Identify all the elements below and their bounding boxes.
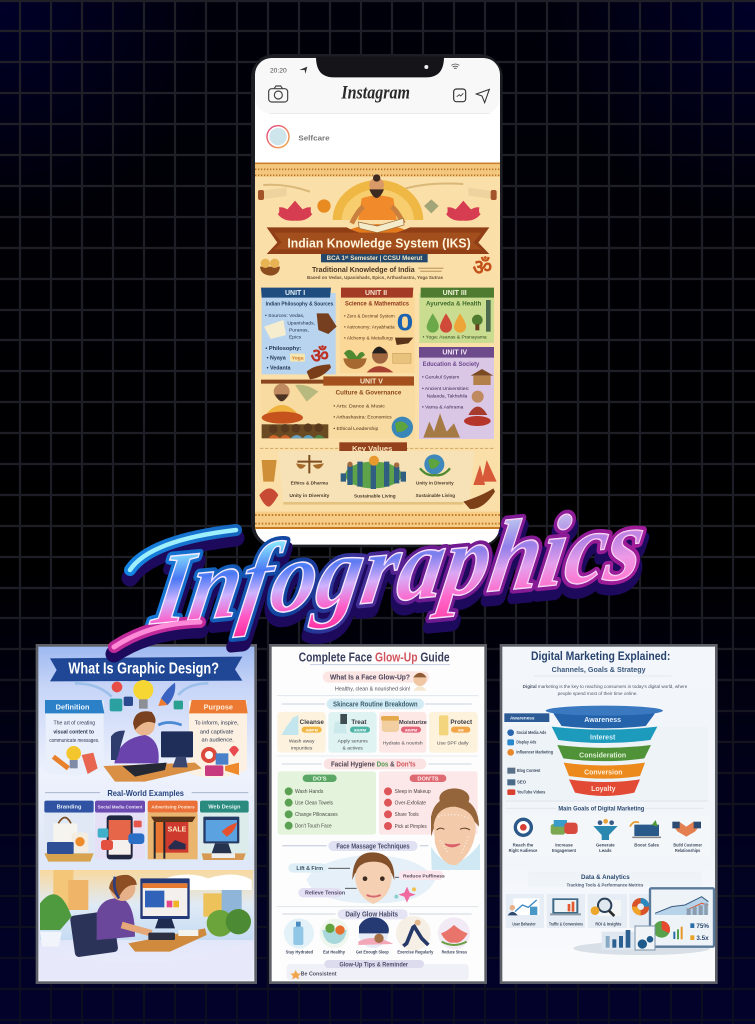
- card 1 purpose panel: and captivate: [200, 729, 233, 735]
- card 1 purpose panel: Purpose: [204, 703, 233, 712]
- massage illustration: Relieve Tension: [305, 891, 345, 897]
- card 1 example: web design: [200, 801, 249, 860]
- key values panel: Ethics & Dharma: [291, 480, 328, 486]
- poster sage illustration: [333, 174, 423, 237]
- card 1 example: advertising: SALE: [168, 827, 187, 834]
- card 3 intro: [523, 684, 688, 696]
- do's panel: [278, 771, 376, 835]
- profile row: [267, 126, 330, 148]
- card 1 title banner: [50, 657, 242, 681]
- unit V panel: • Ethical Leadership: [333, 426, 379, 432]
- card 2 skincare heading: Skincare Routine Breakdown: [333, 702, 418, 709]
- title shadow layer: Infographics: [145, 495, 653, 655]
- poster lotus flowers: [278, 199, 481, 221]
- don'ts panel: DON'TS: [417, 776, 439, 782]
- skincare step: moisturize: Hydrate & nourish: [383, 741, 423, 747]
- card 2 massage heading: [282, 841, 428, 851]
- poster scrolls: [258, 183, 497, 200]
- analytics tiles: ROI & Insights: [595, 922, 622, 927]
- channel list: Blog Content: [517, 768, 541, 773]
- unit IV panel: [419, 347, 494, 439]
- status bar: [270, 64, 459, 75]
- skincare step: protect: Use SPF daily: [437, 741, 469, 747]
- unit I panel: ॐ: [311, 344, 329, 367]
- card 1 definition panel: visual content to: [53, 729, 94, 735]
- unit I panel: [261, 288, 337, 379]
- poster side icons: ॐ: [473, 256, 492, 280]
- card 1 section heading: Real-World Examples: [107, 788, 184, 798]
- instagram header: [269, 82, 490, 113]
- habits icons: Exercise Regularly: [397, 950, 434, 955]
- unit II panel: • Zero & Decimal System: [344, 313, 395, 319]
- dashboard illustration: 3.5x: [696, 935, 709, 942]
- dashboard illustration: [573, 888, 714, 955]
- channel list: SEO: [517, 779, 527, 784]
- unit I panel: Yoga: [292, 356, 304, 362]
- massage illustration: [288, 852, 445, 904]
- unit I panel: • Philosophy:: [265, 346, 301, 352]
- goals row: Leads: [599, 848, 612, 853]
- don'ts panel: Sleep in Makeup: [395, 789, 431, 795]
- unit V panel: UNIT V: [360, 379, 383, 386]
- do's panel: Use Clean Towels: [295, 801, 333, 807]
- title face layer: Infographics: [145, 487, 653, 647]
- skincare step: treat: Treat: [351, 719, 367, 726]
- skincare step: moisturize: Moisturize: [399, 720, 427, 726]
- card 2 intro: [277, 671, 478, 696]
- unit III panel: Ayurveda & Health: [426, 302, 482, 308]
- poster subtitle: Based on Vedas, Upanishads, Epics, Arthashastra, Yoga Sutras: [307, 275, 443, 280]
- card 1 purpose panel: To inform, inspire,: [195, 721, 239, 727]
- unit III panel: • Yoga: Asanas & Pranayama: [423, 334, 487, 340]
- profile row: Selfcare: [298, 135, 330, 142]
- card 1 title banner: What Is Graphic Design?: [68, 660, 219, 677]
- poster title ribbon: Indian Knowledge System (IKS): [287, 236, 471, 251]
- goals row: Relationships: [675, 848, 701, 853]
- unit I panel: Epics: [289, 334, 302, 340]
- unit IV panel: • Varna & Ashrama: [422, 405, 464, 411]
- channel list: [507, 729, 553, 795]
- card 3 title: [531, 650, 672, 676]
- card 1 example: advertising: Advertising Posters: [151, 804, 195, 810]
- habits icons: [284, 916, 470, 955]
- unit II panel: • Astronomy: Aryabhatta: [344, 325, 395, 331]
- script title Infographics: [114, 487, 653, 655]
- phone mockup: [251, 54, 503, 547]
- card 1 example: social: [95, 801, 145, 859]
- unit I panel: UNIT I: [285, 290, 305, 297]
- unit II panel: UNIT II: [365, 290, 387, 297]
- instagram header: Instagram: [341, 82, 410, 103]
- poster subtitle: [307, 254, 443, 280]
- analytics heading: Data & Analytics: [581, 874, 630, 881]
- tips panel: [287, 961, 469, 980]
- skincare step: treat: Apply serums: [338, 739, 368, 745]
- card 2 intro: Healthy, clean & nourished skin!: [335, 687, 411, 693]
- unit V panel: • Arts: Dance & Music: [333, 403, 386, 409]
- card 1 example: web design: Web Design: [208, 805, 241, 811]
- poster side icons: [260, 256, 492, 280]
- poster title ribbon: [267, 227, 489, 254]
- unit IV panel: Education & Society: [423, 362, 480, 368]
- unit II panel: [340, 288, 415, 373]
- funnel: Awareness: [584, 717, 621, 724]
- card 2 hygiene heading: Facial Hygiene Dos & Don'ts: [331, 762, 416, 769]
- skincare step: protect: [429, 712, 478, 753]
- channel list: Social Media Ads: [516, 730, 547, 735]
- massage illustration: Reduce Puffiness: [403, 873, 445, 879]
- title outline layer: Infographics: [145, 487, 653, 647]
- card 3 intro: people spend most of their time online.: [558, 691, 638, 696]
- don'ts panel: [379, 771, 478, 835]
- unit II panel: • Alchemy & Metallurgy: [344, 335, 394, 341]
- goals row: Increase: [555, 842, 573, 847]
- do's panel: Wash Hands: [295, 789, 324, 795]
- analytics heading: Tracking Tools & Performance Metrics: [567, 883, 644, 889]
- funnel: Loyalty: [591, 786, 616, 793]
- habits icons: Eat Healthy: [323, 949, 345, 954]
- unit III panel: UNIT III: [443, 290, 467, 297]
- skincare step: moisturize: [379, 712, 427, 753]
- unit I panel: • Vedanta: [267, 365, 290, 371]
- card 1 bottom scene: [40, 870, 253, 980]
- skincare step: cleanse: [277, 712, 326, 753]
- card 1 definition panel: Definition: [56, 703, 90, 712]
- card 1 idea icons: [75, 680, 208, 725]
- card: What Is Graphic Design: [37, 645, 256, 983]
- goals row: Generate: [596, 842, 615, 847]
- IKS poster: [255, 163, 500, 528]
- unit I panel: Puranas,: [289, 328, 309, 334]
- card 1 purpose panel: [189, 700, 248, 778]
- unit I panel: Upanishads,: [287, 320, 315, 326]
- card 3 intro: Digital marketing is the key to reaching consumers in today's digital world, where: [523, 684, 684, 689]
- card 2 habits heading: Daily Glow Habits: [345, 912, 398, 919]
- tips panel: Be Consistent: [301, 971, 337, 977]
- don'ts panel: Over-Exfoliate: [395, 801, 426, 807]
- title face layer: Infographics: [145, 487, 653, 647]
- funnel: Interest: [590, 734, 616, 741]
- card 2 intro: What Is a Face Glow-Up?: [330, 673, 410, 682]
- card 2 title: Complete Face Glow-Up Guide: [299, 650, 450, 665]
- goals row: [504, 815, 711, 857]
- skincare step: cleanse: impurities: [291, 745, 313, 751]
- analytics heading: [528, 872, 702, 889]
- funnel: [504, 706, 708, 800]
- do's panel: Change Pillowcases: [295, 812, 338, 818]
- card 1 purpose panel: an audience.: [201, 738, 234, 744]
- do's panel: DO'S: [313, 776, 327, 782]
- card 2 hygiene heading: [277, 756, 478, 769]
- card 1 example: social: Social Media Content: [98, 804, 143, 810]
- skincare step: treat: AM/PM: [354, 728, 366, 732]
- card 2 habits heading: [277, 907, 478, 919]
- goals row: Right Audience: [509, 848, 538, 853]
- skincare step: treat: [328, 712, 377, 753]
- habits icons: Stay Hydrated: [286, 949, 313, 954]
- poster subtitle: BCA 1ˢᵗ Semester | CCSU Meerut: [327, 255, 422, 262]
- don'ts panel: Share Tools: [395, 812, 419, 818]
- unit I panel: Indian Philosophy & Sources: [266, 302, 333, 308]
- goals row: Reach the: [513, 842, 534, 847]
- unit I panel: • Nyaya: [267, 356, 286, 362]
- channel list: Influencer Marketing: [516, 750, 553, 755]
- tips panel: Glow-Up Tips & Reminder: [339, 961, 408, 968]
- woman face portrait: [431, 788, 480, 870]
- skincare step: cleanse: Wash away: [289, 739, 315, 745]
- card 1 definition panel: The art of creating: [53, 721, 95, 727]
- skincare step: protect: AM: [458, 728, 464, 732]
- unit V panel: • Arthashastra: Economics: [333, 415, 392, 421]
- unit III panel: [419, 288, 494, 343]
- poster bottom border: [255, 512, 500, 528]
- skincare step: protect: Protect: [450, 719, 473, 726]
- unit I panel: • Sources: Vedas,: [265, 313, 304, 319]
- key values banner: Key Values: [352, 444, 392, 453]
- status bar: 20:20: [270, 68, 287, 75]
- dashboard illustration: 75%: [696, 923, 709, 930]
- card 3 title: Channels, Goals & Strategy: [552, 665, 647, 674]
- goals row: Boost Sales: [634, 842, 660, 847]
- key values panel: Sustainable Living: [354, 493, 396, 499]
- channel list: YouTube Videos: [517, 789, 546, 794]
- massage illustration: Lift & Firm: [296, 866, 323, 872]
- analytics tiles: Traffic & Conversions: [549, 922, 583, 927]
- skincare step: treat: & actives: [343, 745, 363, 751]
- card 1 example: branding: Branding: [57, 805, 82, 811]
- goals heading: Main Goals of Digital Marketing: [558, 806, 644, 813]
- channel list: Display Ads: [516, 740, 537, 745]
- unit II panel: 0: [397, 309, 413, 336]
- card 1 designer illustration: [103, 711, 202, 782]
- card 1 definition panel: [45, 700, 104, 775]
- card 1 example: advertising: [148, 801, 198, 859]
- card 2 skincare heading: [282, 699, 472, 709]
- unit V panel: [261, 376, 415, 438]
- key values panel: Unity in Diversity: [289, 493, 330, 499]
- goals row: Build Customer: [673, 842, 702, 847]
- key values panel: Sustainable Living: [416, 493, 455, 499]
- don'ts panel: Pick at Pimples: [395, 824, 427, 830]
- unit IV panel: Nalanda, Takhshila: [427, 393, 468, 399]
- funnel: Consideration: [579, 753, 626, 760]
- key values panel: Unity in Diversity: [416, 480, 454, 486]
- card 2 massage heading: Face Massage Techniques: [336, 844, 410, 851]
- card: Complete Face Glow-Up Guide: [270, 645, 486, 983]
- skincare step: cleanse: AM/PM: [306, 728, 318, 732]
- skincare step: cleanse: Cleanse: [300, 719, 324, 726]
- funnel: Awareness: [510, 715, 535, 720]
- unit II panel: Science & Mathematics: [345, 302, 410, 308]
- do's panel: Don't Touch Face: [295, 824, 332, 830]
- unit IV panel: • Ancient Universities:: [422, 386, 469, 392]
- unit IV panel: UNIT IV: [442, 350, 468, 357]
- card 1 definition panel: communicate messages.: [49, 738, 100, 744]
- card 1 example: branding: [44, 801, 94, 862]
- unit IV panel: • Gurukul System: [422, 374, 459, 380]
- key values panel: [259, 451, 497, 509]
- funnel: Conversion: [584, 770, 623, 777]
- poster subtitle: Traditional Knowledge of India: [312, 267, 415, 274]
- skincare step: moisturize: AM/PM: [405, 728, 417, 732]
- habits icons: Reduce Stress: [442, 950, 467, 955]
- analytics tiles: User Behavior: [512, 922, 536, 927]
- analytics tiles: [506, 894, 653, 928]
- card: Digital Marketing Explained: [501, 645, 716, 983]
- habits icons: Get Enough Sleep: [356, 949, 389, 954]
- goals row: Engagement: [552, 848, 577, 853]
- key values banner: [260, 442, 493, 453]
- card 3 title: Digital Marketing Explained:: [531, 650, 670, 663]
- unit V panel: Culture & Governance: [336, 390, 402, 397]
